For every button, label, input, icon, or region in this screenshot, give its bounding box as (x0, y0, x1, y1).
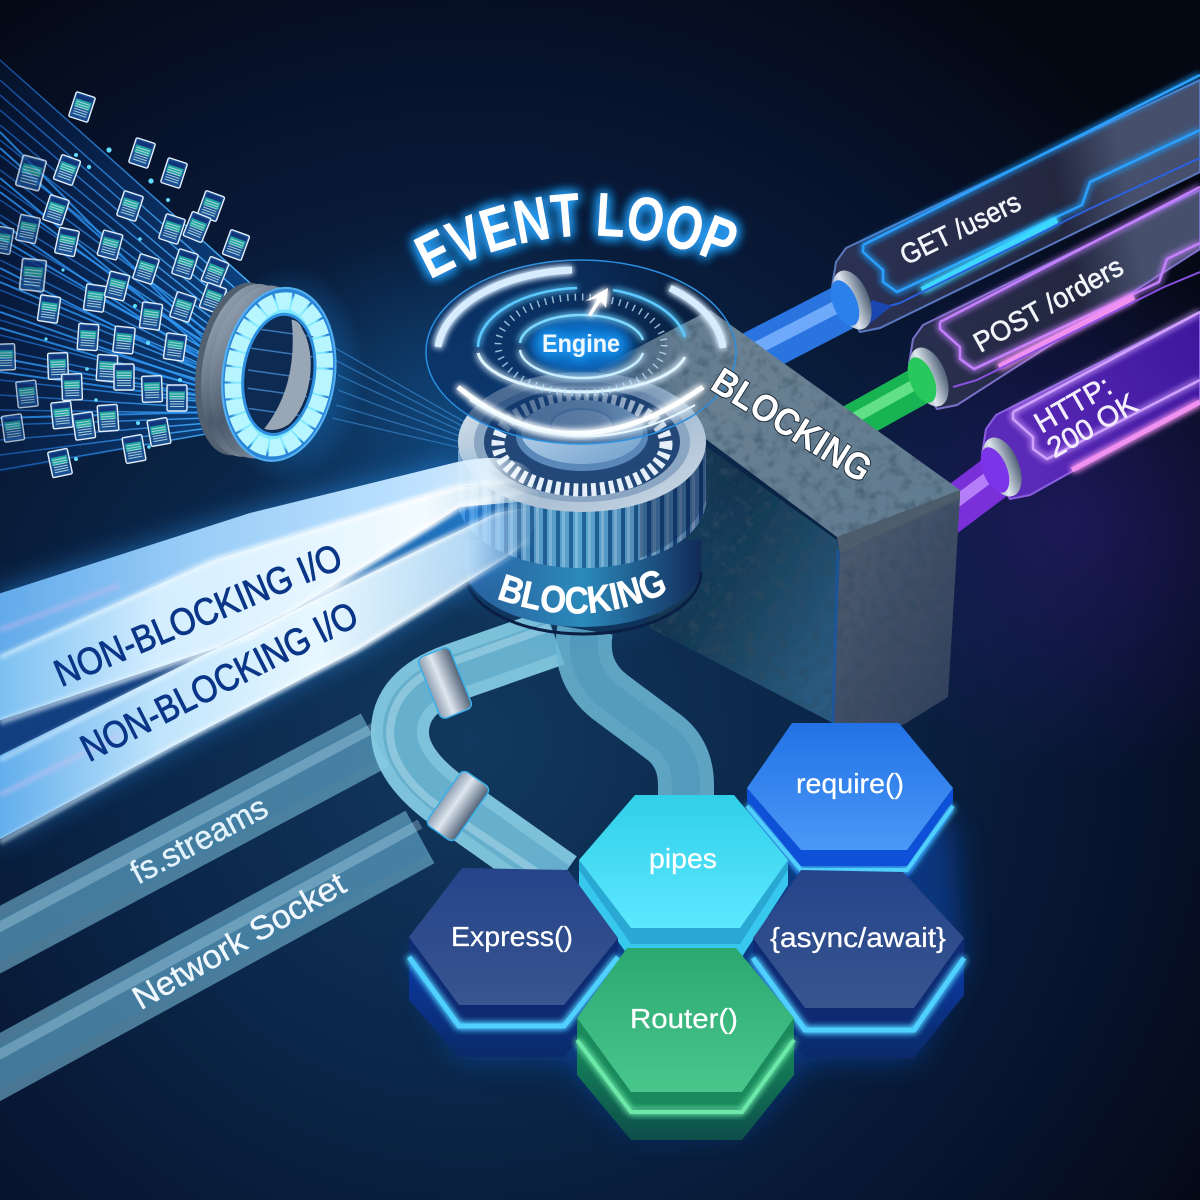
purple ambient glow (810, 260, 1200, 780)
title: Event Loop: EVENT LOOP (404, 182, 748, 288)
tube: green connector (840, 376, 930, 430)
mid arcs (470, 288, 695, 436)
hex: Router(): Router() (630, 1003, 738, 1034)
pipe clamp lower (425, 769, 491, 843)
module: POST /orders (902, 187, 1200, 412)
tube: Network Socket (0, 824, 420, 1089)
streaks (0, 478, 540, 842)
data stream: fibres and documents flowing into ring (0, 60, 258, 478)
beam band 1 (0, 458, 535, 657)
beam glow (0, 463, 507, 842)
beam band 2 (0, 485, 540, 722)
stone block wall (598, 310, 960, 725)
hex floor glow (409, 800, 964, 1130)
tube: fs.streams (0, 727, 375, 961)
stone label: BLOCKING (704, 360, 879, 491)
module: GET /users (825, 75, 1200, 335)
hex: {async/await}: {async/await} (770, 922, 946, 953)
central pipe (584, 630, 686, 805)
hexagon modules (409, 723, 964, 1140)
hex: {async/await} (753, 870, 964, 1058)
label: GET /users (895, 186, 1025, 271)
hex: pipes (579, 795, 788, 960)
documents (0, 92, 250, 478)
tube: Network Socket: Network Socket (126, 865, 352, 1017)
engine: gear assembly (458, 372, 725, 636)
icon: rotation arrow (585, 288, 608, 316)
toothed band (458, 450, 706, 568)
label: HTTP: (1029, 370, 1118, 440)
gear base with label (466, 540, 702, 636)
tick ring (498, 297, 664, 393)
gear base with label: BLOCKING (498, 570, 666, 614)
hex: Router() (577, 948, 794, 1140)
light beams: non-blocking I/O (0, 458, 540, 842)
module: HTTP 200 OK (975, 312, 1200, 502)
HUD: engine rings (426, 260, 736, 444)
tube: fs.streams: fs.streams (124, 788, 274, 891)
icon: glowing ring (185, 265, 365, 485)
blue ambient glow behind engine (230, 220, 710, 620)
label: POST /orders (968, 251, 1128, 358)
label: Engine: Engine (542, 330, 620, 358)
label: non-blocking 1: NON-BLOCKING I/O (48, 536, 348, 695)
top disc (458, 372, 706, 512)
elbow pipe (390, 627, 560, 888)
needle bearing (498, 398, 666, 490)
tube: purple connector (945, 465, 1005, 515)
hex: Express() (409, 868, 618, 1057)
tube: blue connector (730, 300, 850, 366)
hex: Express(): Express() (451, 921, 573, 952)
fibre fan (0, 60, 258, 473)
fibre dots (44, 147, 202, 461)
light lines from ring to engine (330, 345, 470, 450)
outer arcs (438, 270, 723, 434)
label: 200 OK (1042, 387, 1144, 465)
beam gap (0, 596, 322, 758)
hex: require(): require() (796, 768, 904, 799)
label: non-blocking 2: NON-BLOCKING I/O (74, 594, 365, 770)
pipe clamp upper (417, 646, 473, 720)
beam band 3 (0, 505, 540, 842)
hex: require() (747, 723, 953, 880)
hex: pipes: pipes (649, 843, 717, 874)
hub (521, 400, 643, 464)
pipes (0, 627, 686, 1089)
